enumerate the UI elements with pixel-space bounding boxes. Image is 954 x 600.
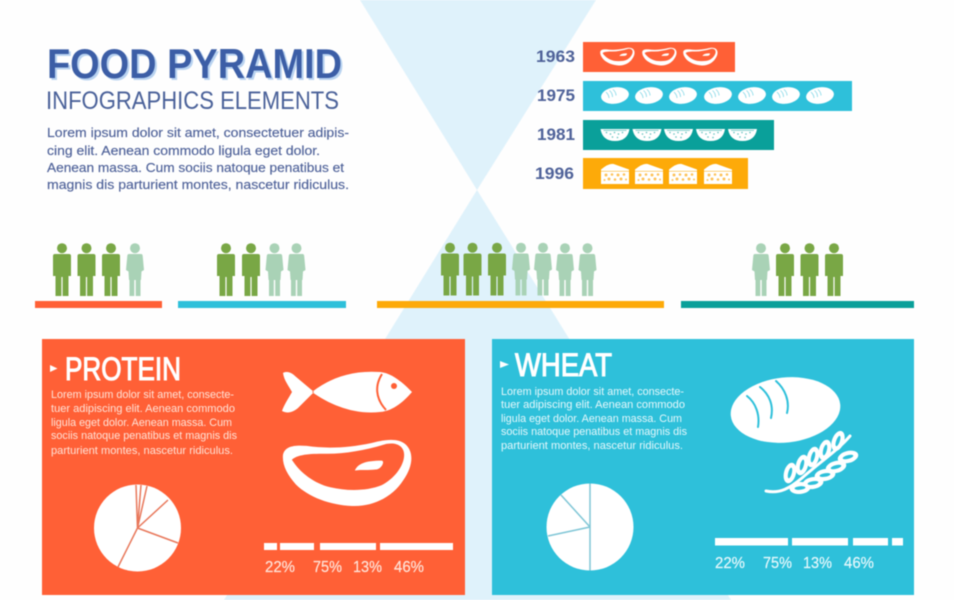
wheat paragraph: sociis natoque penatibus et magnis dis (501, 426, 687, 438)
percentage labels (715, 555, 874, 572)
people group 4 (681, 243, 914, 308)
people group 2 (178, 243, 346, 308)
row 1996: cheese: 1996 (535, 164, 574, 183)
protein paragraph (51, 389, 237, 457)
protein heading: PROTEIN (65, 351, 181, 387)
intro paragraph: Aenean massa. Cum sociis natoque penatibus et (47, 161, 345, 175)
panel: protein (42, 339, 465, 595)
percentage labels: 46% (844, 555, 874, 572)
progress bars (715, 538, 903, 546)
icon: steak (283, 440, 411, 506)
row 1975: bread (537, 81, 852, 111)
percentage labels (265, 559, 424, 576)
timeline chart (535, 42, 852, 189)
people group 3 (377, 243, 664, 308)
wheat paragraph: tuer adipiscing elit. Aenean commodo (501, 399, 685, 411)
protein paragraph: parturient montes, nascetur ridiculus. (51, 445, 233, 457)
protein paragraph: ligula eget dolor. Aenean massa. Cum (51, 417, 232, 429)
title: Food Pyramid: FOOD PYRAMID (47, 40, 342, 87)
background hourglass triangles (224, 0, 731, 600)
percentage labels: 13% (353, 559, 382, 576)
icon: bread (727, 372, 844, 448)
percentage labels: 46% (394, 559, 424, 576)
percentage labels: 22% (265, 559, 295, 576)
protein paragraph: tuer adipiscing elit. Aenean commodo (51, 403, 235, 415)
wheat paragraph (501, 386, 687, 452)
row 1996: cheese (535, 158, 748, 189)
wheat paragraph: parturient montes, nascetur ridiculus. (501, 440, 683, 452)
progress bars (264, 543, 453, 550)
intro paragraph: magnis dis parturient montes, nascetur ridiculus. (47, 178, 349, 192)
title: Food Pyramid: FOOD PYRAMID (49, 42, 344, 89)
subtitle: INFOGRAPHICS ELEMENTS (46, 87, 339, 115)
intro paragraph: cing elit. Aenean commodo ligula eget dolor. (47, 144, 320, 158)
row 1981: melon: 1981 (537, 125, 575, 144)
panel: wheat (492, 339, 914, 595)
pie chart (546, 484, 634, 570)
intro paragraph (47, 126, 349, 192)
percentage labels: 75% (313, 559, 342, 576)
row 1975: bread: 1975 (537, 86, 575, 105)
percentage labels: 75% (763, 555, 792, 572)
row 1981: melon (537, 120, 774, 150)
title block (46, 40, 349, 192)
wheat heading: WHEAT (515, 347, 612, 383)
pie chart (94, 484, 181, 572)
row 1963: steak: 1963 (536, 47, 575, 66)
wheat paragraph: ligula eget dolor. Aenean massa. Cum (501, 413, 682, 425)
people group 1 (35, 243, 162, 308)
row 1963: steak (536, 42, 735, 72)
icon: wheat ear (766, 429, 860, 495)
percentage labels: 22% (715, 555, 745, 572)
icon: fish (282, 372, 412, 413)
percentage labels: 13% (803, 555, 832, 572)
protein paragraph: Lorem ipsum dolor sit amet, consecte- (51, 389, 234, 401)
wheat paragraph: Lorem ipsum dolor sit amet, consecte- (501, 386, 684, 398)
protein paragraph: sociis natoque penatibus et magnis dis (51, 430, 237, 442)
intro paragraph: Lorem ipsum dolor sit amet, consectetuer adipis- (47, 126, 349, 140)
